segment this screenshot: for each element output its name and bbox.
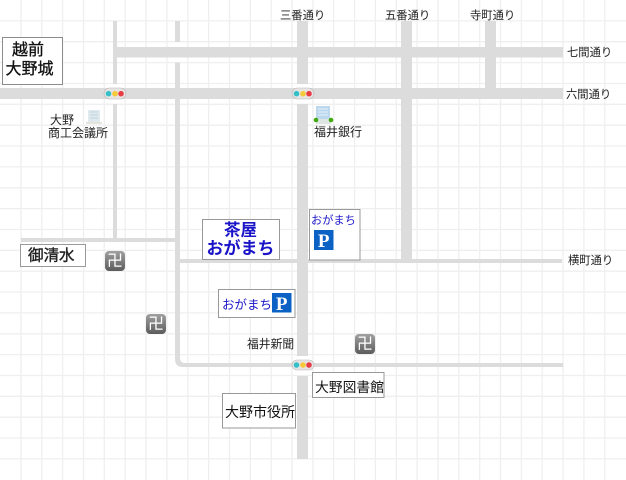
icon: bank building [314,106,333,124]
label: 寺町通り: 寺町通り [470,9,515,22]
road: 三番通り middle segment [297,104,308,356]
road: 六間通り [0,88,563,99]
label: 五番通り: 五番通り [385,9,430,22]
label: 茶屋おがまち [202,220,280,260]
label: 大野市役所: 大野市役所 [225,404,295,420]
traffic signal: centre [292,88,314,99]
road: 七間通り [117,47,563,58]
road: 横町通り [180,259,562,263]
label: 越前大野城 [2,38,62,84]
parking: おがまち north [310,210,360,260]
label: 福井銀行: 福井銀行 [314,124,362,139]
icon: temple 1 [105,251,125,271]
label: 三番通り: 三番通り [280,9,325,22]
road: 御清水 side street [21,238,175,242]
label: 越前大野城: 大野城 [5,60,54,78]
parking: おがまち south: P [276,294,288,315]
label: 茶屋おがまち: 茶屋 [224,220,257,240]
road: 三番通り south segment [297,376,308,459]
icon: temple 3 [355,334,375,354]
road: 寺町通り [485,21,496,88]
traffic signal: south [292,360,314,370]
road: west street lower segment and south road [175,62,563,367]
parking: おがまち south [218,290,295,318]
label: 七間通り: 七間通り [567,46,612,59]
traffic signal: west [104,88,126,99]
icon: temple 2 [146,314,166,334]
road: west street upper segment [175,21,180,42]
road: thin street north segment [113,21,117,84]
icon: chamber of commerce building [86,110,102,124]
label: 大野図書館: 大野図書館 [315,380,384,395]
label: 大野商工会議所: 商工会議所 [48,126,108,140]
label: 越前大野城: 越前 [12,41,44,59]
label: 横町通り: 横町通り [568,253,613,267]
label: 御清水: 御清水 [28,246,75,264]
road: 五番通り [401,21,412,261]
label: 大野商工会議所 [48,113,108,140]
icon: temple 2: 卍 [148,315,164,333]
label: 福井新聞: 福井新聞 [247,337,294,351]
label: 茶屋おがまち: おがまち [206,238,274,258]
road: thin street south segment [113,104,117,238]
parking: おがまち north: おがまち [311,213,356,227]
label: 大野商工会議所: 大野 [50,113,74,127]
label: 大野市役所 [222,394,296,428]
icon: temple 1: 卍 [107,252,123,270]
icon: temple 3: 卍 [357,335,373,353]
label: 六間通り: 六間通り [566,88,611,101]
label: 大野図書館 [312,372,384,398]
road: 三番通り north segment [297,21,308,84]
label: 御清水 [20,244,86,266]
parking: おがまち north: P [318,231,330,252]
parking: おがまち south: おがまち [222,297,272,312]
